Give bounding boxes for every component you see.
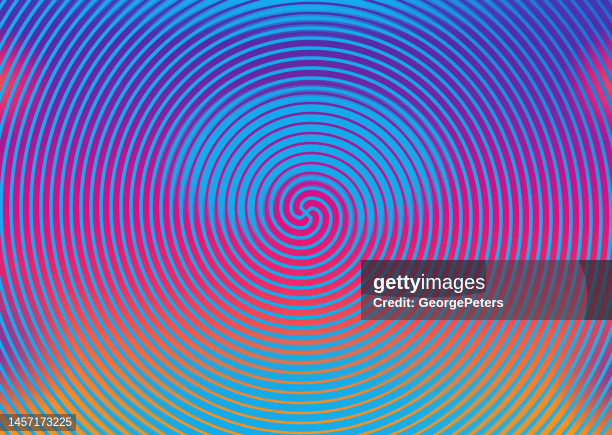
image id number: 1457173225 <box>8 417 72 429</box>
decorative dark shapes <box>361 260 612 320</box>
watermark panel <box>361 260 612 320</box>
watermark logo: gettyimages <box>373 272 485 294</box>
watermark credit: Credit: GeorgePeters <box>373 295 504 310</box>
image id tag <box>0 414 76 431</box>
